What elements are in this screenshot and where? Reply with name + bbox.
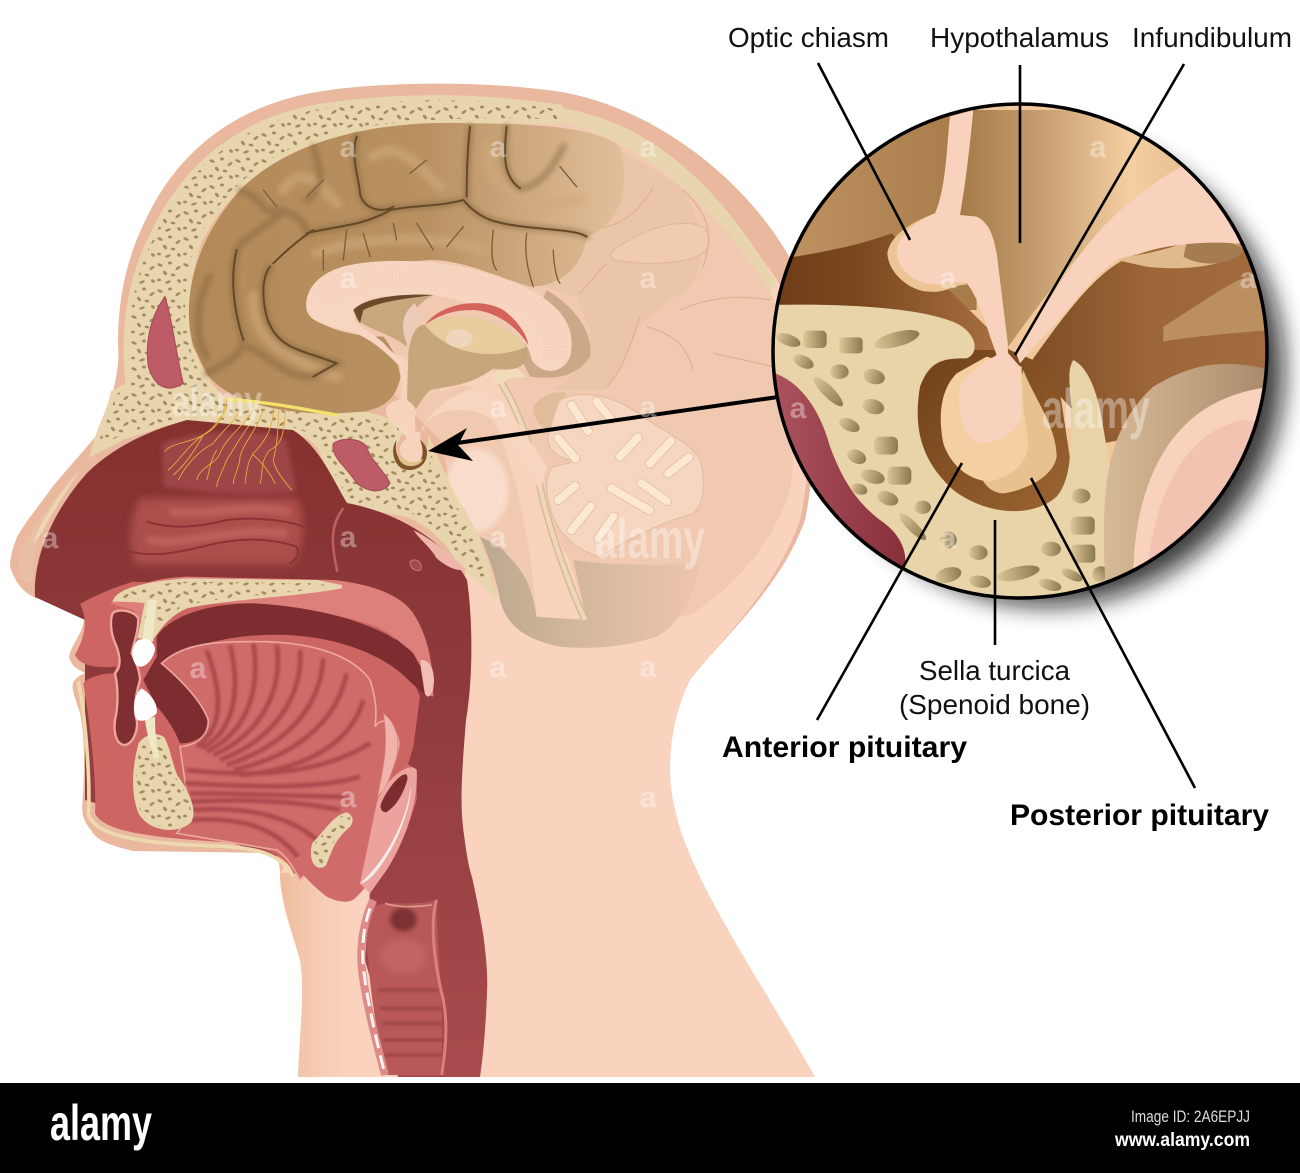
posterior fossa structures <box>440 360 703 648</box>
label: optic chiasm: Optic chiasm <box>728 22 889 53</box>
bone cavities <box>774 326 1111 593</box>
pink stalk and chiasm <box>897 110 1022 443</box>
nasal cartilage <box>19 463 83 583</box>
vocal fold stripe <box>359 787 411 884</box>
sulci soft shadow <box>198 127 587 377</box>
occipital tan base <box>480 537 700 648</box>
fornix <box>403 304 417 343</box>
stock watermarks: a <box>340 781 357 814</box>
neck front shading <box>280 872 328 1077</box>
mandible <box>134 736 192 829</box>
optic stalk small <box>386 357 424 463</box>
head silhouette skin <box>10 84 815 1077</box>
stock watermarks: a <box>340 521 357 554</box>
posterior pituitary <box>983 370 1057 493</box>
stock watermarks: a <box>640 131 657 164</box>
leader lines <box>817 63 1195 788</box>
concha ridges <box>150 509 287 541</box>
sella cavity <box>910 350 1077 523</box>
uvula <box>421 660 434 697</box>
zoomed pituitary circle <box>770 104 1270 617</box>
tracheal rings <box>378 990 443 1055</box>
upper left tissue <box>770 110 977 310</box>
stock watermarks: a <box>640 781 657 814</box>
nasal lining glow <box>131 498 303 565</box>
stock watermarks: a <box>340 262 357 295</box>
thalamus <box>407 316 527 418</box>
soft palate <box>110 577 433 697</box>
lower tooth <box>134 688 159 758</box>
sulci <box>233 127 587 377</box>
stock watermarks: alamy <box>595 507 705 570</box>
stock watermarks: a <box>640 262 657 295</box>
image id: Image ID: 2A6EPJJ <box>1131 1107 1250 1126</box>
pons <box>440 360 587 620</box>
lips and oral base <box>75 582 420 880</box>
tongue <box>162 642 399 880</box>
stock watermarks <box>42 131 1257 814</box>
vestibule <box>111 611 140 745</box>
mini sella <box>393 440 427 470</box>
infundibular pink sheath <box>1015 167 1270 363</box>
stock watermarks: a <box>1240 262 1257 295</box>
label: sella turcica: Sella turcica <box>919 655 1070 686</box>
dashed cartilage <box>363 908 385 1075</box>
red fornix arc <box>425 303 528 345</box>
label: infundibulum: Infundibulum <box>1132 22 1292 53</box>
faded brain folds <box>533 130 773 390</box>
adenoid tissue <box>413 530 467 570</box>
label: sphenoid bone: (Spenoid bone) <box>899 689 1090 720</box>
stock watermarks: alamy <box>1042 377 1150 440</box>
footer logo: alamy <box>50 1095 152 1151</box>
brainstem tube <box>497 377 585 620</box>
label: anterior pituitary: Anterior pituitary <box>722 731 967 764</box>
front strip <box>361 900 385 1075</box>
hard palate bone <box>115 580 342 637</box>
tongue muscle fibres <box>185 643 370 860</box>
stock watermarks: a <box>490 391 507 424</box>
stock watermarks: a <box>190 652 207 685</box>
stock watermarks: a <box>640 651 657 684</box>
tan area below callosum <box>520 290 590 378</box>
stock watermarks: a <box>490 651 507 684</box>
cerebellum <box>547 394 703 557</box>
faded posterior brain <box>300 120 794 640</box>
pharynx and nasal cavity <box>35 420 487 1077</box>
label: hypothalamus: Hypothalamus <box>930 22 1109 53</box>
anterior pituitary <box>941 357 1028 482</box>
stock watermarks: a <box>340 131 357 164</box>
olfactory mucosa <box>162 432 297 494</box>
sphenoid sinus <box>333 439 390 491</box>
trachea back wall line <box>433 900 446 1075</box>
stock watermarks: a <box>640 391 657 424</box>
conchae folds <box>129 518 304 564</box>
stock watermarks: a <box>790 392 807 425</box>
stock watermarks: a <box>490 131 507 164</box>
laryngeal pocket <box>380 773 408 813</box>
olfactory nerves <box>165 400 292 490</box>
hyoid bone <box>312 813 352 867</box>
stock watermarks: a <box>42 522 59 555</box>
pointer arrow <box>428 397 778 461</box>
larynx and oesophagus <box>290 763 446 1075</box>
chin tan band <box>78 682 293 877</box>
stock watermarks: a <box>1090 131 1107 164</box>
stock watermarks: a <box>940 262 957 295</box>
footer bar <box>0 1083 1300 1173</box>
neck and back of head <box>280 118 815 1077</box>
bone pores <box>93 98 560 593</box>
head illustration <box>10 84 815 1077</box>
trachea lumen <box>367 900 442 1075</box>
oral cavity <box>143 603 425 743</box>
corpus callosum <box>306 261 572 490</box>
foreground brain <box>147 123 624 491</box>
dark suprasellar band <box>770 233 1010 363</box>
pons pink layer <box>1133 387 1270 610</box>
website: www.alamy.com <box>1114 1130 1250 1151</box>
tan wedge <box>1163 270 1270 342</box>
skull bone <box>93 98 777 593</box>
stock watermarks: a <box>490 521 507 554</box>
sphenoid bone <box>770 305 1133 617</box>
hypothalamus <box>960 110 1203 347</box>
tan mass above cerebellum <box>533 392 567 430</box>
epiglottis <box>377 713 398 803</box>
sphenoid sinus red <box>770 372 905 573</box>
label: posterior pituitary: Posterior pituitary <box>1010 799 1269 832</box>
stock watermarks: a <box>940 522 957 555</box>
gyri highlights <box>253 147 580 377</box>
upper tooth <box>132 600 157 667</box>
zoom lens drop shadow <box>812 134 1284 606</box>
thalamus ellipse <box>446 329 472 348</box>
olfactory tract <box>227 399 337 415</box>
ventricle <box>353 295 433 347</box>
right brown region <box>1030 242 1270 443</box>
frontal sinus <box>147 297 183 388</box>
hook of quadrigeminal plate <box>492 367 525 385</box>
optic chiasm edge <box>887 213 967 292</box>
nasal and oral structures <box>19 399 467 880</box>
laryngeal strip <box>360 767 417 893</box>
lower right tissue <box>1103 364 1270 610</box>
larynx pink area <box>290 763 417 902</box>
stock watermarks: alamy <box>172 377 262 426</box>
